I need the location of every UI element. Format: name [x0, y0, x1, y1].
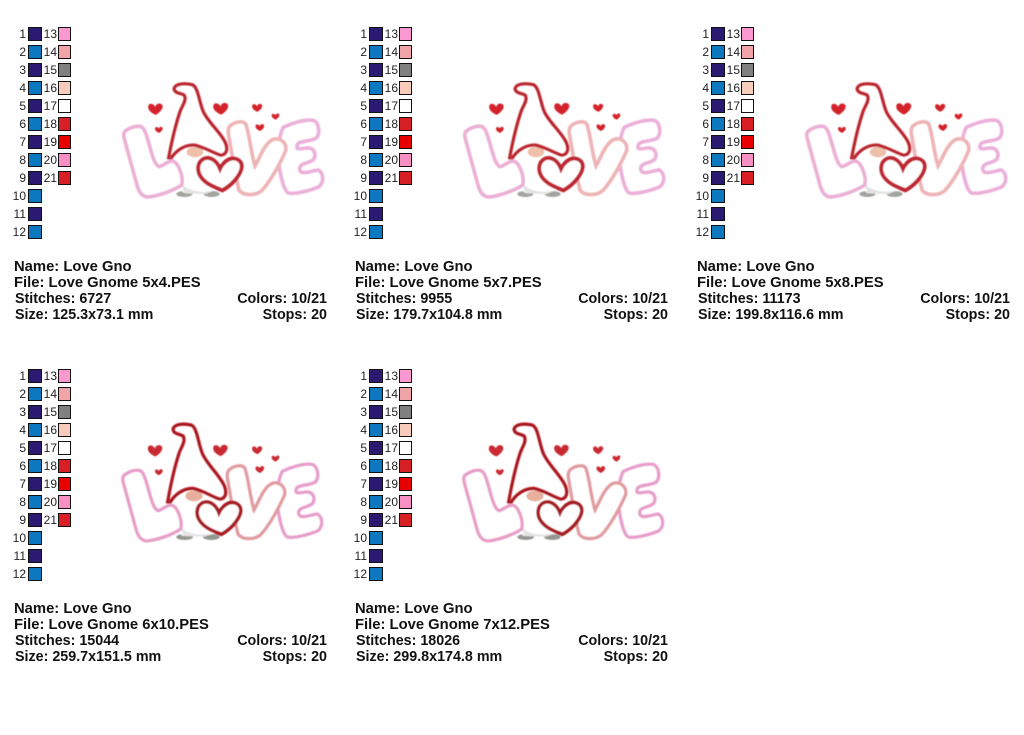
colour palette list: 13	[727, 27, 740, 41]
colour palette list: 13	[44, 27, 57, 41]
panel: Love Gnome 5x7	[354, 27, 668, 323]
colour palette list: 10	[354, 189, 367, 203]
design details text: Stops: 20	[604, 307, 668, 323]
colour palette list: 10	[13, 189, 26, 203]
colour palette list: 15	[44, 63, 57, 77]
colour palette list: 15	[385, 405, 398, 419]
design details text: Size: 125.3x73.1 mm	[15, 307, 153, 323]
design details text: Stitches: 6727	[15, 291, 111, 307]
colour palette list: 4	[360, 81, 367, 95]
design details text: Size: 199.8x116.6 mm	[698, 307, 843, 323]
colour palette list: 5	[360, 99, 367, 113]
colour palette list: 21	[385, 171, 398, 185]
colour palette list: 6	[19, 117, 26, 131]
colour palette list: 2	[702, 45, 709, 59]
colour palette list: 18	[385, 459, 398, 473]
colour palette list: 10	[354, 531, 367, 545]
colour palette list: 7	[19, 135, 26, 149]
design details text: Stops: 20	[263, 307, 327, 323]
design details text: Stops: 20	[946, 307, 1010, 323]
design details text	[355, 601, 668, 665]
colour palette list: 7	[360, 477, 367, 491]
colour palette list: 20	[727, 153, 740, 167]
colour palette list: 12	[13, 567, 26, 581]
colour palette list: 3	[19, 405, 26, 419]
colour palette list: 12	[696, 225, 709, 239]
design details text: File: Love Gnome 5x7.PES	[355, 275, 542, 291]
colour palette list: 19	[385, 135, 398, 149]
design details text: File: Love Gnome 5x4.PES	[14, 275, 201, 291]
panel: Love Gnome 5x4	[13, 27, 327, 323]
colour palette list: 5	[19, 441, 26, 455]
colour palette list: 15	[44, 405, 57, 419]
design details text: Name: Love Gno	[14, 601, 132, 617]
colour palette list	[696, 27, 754, 239]
design details text: Name: Love Gno	[14, 259, 132, 275]
colour palette list: 9	[19, 171, 26, 185]
panel: Love Gnome 6x10	[13, 369, 327, 665]
colour palette list: 3	[702, 63, 709, 77]
design details text	[355, 259, 668, 323]
embroidery design: gnome LOVE	[120, 422, 324, 544]
colour palette list: 11	[697, 207, 709, 221]
colour palette list: 19	[727, 135, 740, 149]
design details text: Name: Love Gno	[355, 601, 473, 617]
colour palette list: 1	[702, 27, 709, 41]
colour palette list: 8	[19, 153, 26, 167]
colour palette list: 17	[44, 441, 57, 455]
design details text	[14, 601, 327, 665]
colour palette list: 16	[385, 81, 398, 95]
colour palette list: 6	[360, 117, 367, 131]
embroidery design: gnome LOVE	[462, 422, 665, 544]
colour palette list: 20	[44, 153, 57, 167]
design details text: Colors: 10/21	[237, 633, 327, 649]
colour palette list	[13, 27, 71, 239]
colour palette list: 17	[385, 441, 398, 455]
colour palette list: 20	[44, 495, 57, 509]
colour palette list: 20	[385, 495, 398, 509]
colour palette list: 9	[360, 171, 367, 185]
embroidery design: gnome LOVE	[122, 81, 325, 200]
design details text: Size: 179.7x104.8 mm	[356, 307, 502, 323]
colour palette list: 21	[385, 513, 398, 527]
colour palette list: 17	[44, 99, 57, 113]
colour palette list: 12	[354, 225, 367, 239]
colour palette list: 15	[385, 63, 398, 77]
colour palette list: 14	[44, 45, 57, 59]
design details text: Name: Love Gno	[697, 259, 815, 275]
colour palette list: 2	[19, 387, 26, 401]
colour palette list: 16	[44, 81, 57, 95]
colour palette list: 2	[360, 45, 367, 59]
colour palette list: 17	[385, 99, 398, 113]
design details text: Colors: 10/21	[237, 291, 327, 307]
colour palette list: 19	[385, 477, 398, 491]
design details text: Stitches: 15044	[15, 633, 119, 649]
colour palette list: 6	[19, 459, 26, 473]
embroidery design: gnome LOVE	[804, 81, 1008, 200]
colour palette list: 1	[19, 369, 26, 383]
colour palette list: 5	[19, 99, 26, 113]
colour palette list: 21	[44, 171, 57, 185]
design details text: File: Love Gnome 6x10.PES	[14, 617, 209, 633]
design details text: Stitches: 18026	[356, 633, 460, 649]
design details text: File: Love Gnome 5x8.PES	[697, 275, 884, 291]
colour palette list: 21	[727, 171, 740, 185]
design details text: Stitches: 11173	[698, 291, 801, 307]
colour palette list: 14	[385, 387, 398, 401]
colour palette list: 16	[385, 423, 398, 437]
colour palette list: 3	[19, 63, 26, 77]
colour palette list: 3	[360, 63, 367, 77]
colour palette list: 1	[360, 369, 367, 383]
colour palette list: 12	[13, 225, 26, 239]
colour palette list: 13	[385, 369, 398, 383]
colour palette list: 1	[360, 27, 367, 41]
colour palette list: 18	[44, 117, 57, 131]
colour palette list: 19	[44, 477, 57, 491]
colour palette list: 9	[702, 171, 709, 185]
colour palette list: 8	[19, 495, 26, 509]
colour palette list: 14	[727, 45, 740, 59]
colour palette list: 10	[696, 189, 709, 203]
colour palette list: 2	[19, 45, 26, 59]
panel: Love Gnome 5x8	[696, 27, 1010, 323]
colour palette list	[354, 369, 412, 581]
design details text: Colors: 10/21	[578, 291, 668, 307]
colour palette list: 7	[19, 477, 26, 491]
design details text: Size: 259.7x151.5 mm	[15, 649, 161, 665]
colour palette list: 19	[44, 135, 57, 149]
colour palette list	[354, 27, 412, 239]
embroidery design: gnome LOVE	[462, 81, 666, 200]
colour palette list: 7	[360, 135, 367, 149]
colour palette list: 4	[360, 423, 367, 437]
design details text: Name: Love Gno	[355, 259, 473, 275]
colour palette list: 11	[355, 207, 367, 221]
colour palette list: 13	[385, 27, 398, 41]
design details text: Stops: 20	[604, 649, 668, 665]
colour palette list: 5	[702, 99, 709, 113]
colour palette list: 7	[702, 135, 709, 149]
design details text	[14, 259, 327, 323]
colour palette list: 11	[355, 549, 367, 563]
colour palette list: 12	[354, 567, 367, 581]
colour palette list: 9	[360, 513, 367, 527]
colour palette list: 4	[19, 81, 26, 95]
design details text: File: Love Gnome 7x12.PES	[355, 617, 550, 633]
design details text: Stops: 20	[263, 649, 327, 665]
colour palette list: 14	[44, 387, 57, 401]
design details text: Size: 299.8x174.8 mm	[356, 649, 502, 665]
colour palette list: 4	[702, 81, 709, 95]
colour palette list: 4	[19, 423, 26, 437]
panel: Love Gnome 7x12	[354, 369, 668, 665]
colour palette list: 8	[360, 495, 367, 509]
design details text: Colors: 10/21	[920, 291, 1010, 307]
colour palette list: 5	[360, 441, 367, 455]
colour palette list: 18	[44, 459, 57, 473]
colour palette list: 18	[385, 117, 398, 131]
design details text: Colors: 10/21	[578, 633, 668, 649]
design details text: Stitches: 9955	[356, 291, 452, 307]
colour palette list: 2	[360, 387, 367, 401]
colour palette list: 10	[13, 531, 26, 545]
colour palette list: 8	[360, 153, 367, 167]
colour palette list: 16	[727, 81, 740, 95]
colour palette list: 20	[385, 153, 398, 167]
colour palette list: 3	[360, 405, 367, 419]
colour palette list: 18	[727, 117, 740, 131]
colour palette list	[13, 369, 71, 581]
colour palette list: 1	[19, 27, 26, 41]
colour palette list: 6	[702, 117, 709, 131]
colour palette list: 6	[360, 459, 367, 473]
colour palette list: 11	[14, 207, 26, 221]
colour palette list: 16	[44, 423, 57, 437]
colour palette list: 13	[44, 369, 57, 383]
colour palette list: 11	[14, 549, 26, 563]
colour palette list: 14	[385, 45, 398, 59]
colour palette list: 17	[727, 99, 740, 113]
colour palette list: 8	[702, 153, 709, 167]
colour palette list: 9	[19, 513, 26, 527]
colour palette list: 15	[727, 63, 740, 77]
colour palette list: 21	[44, 513, 57, 527]
design details text	[697, 259, 1010, 323]
